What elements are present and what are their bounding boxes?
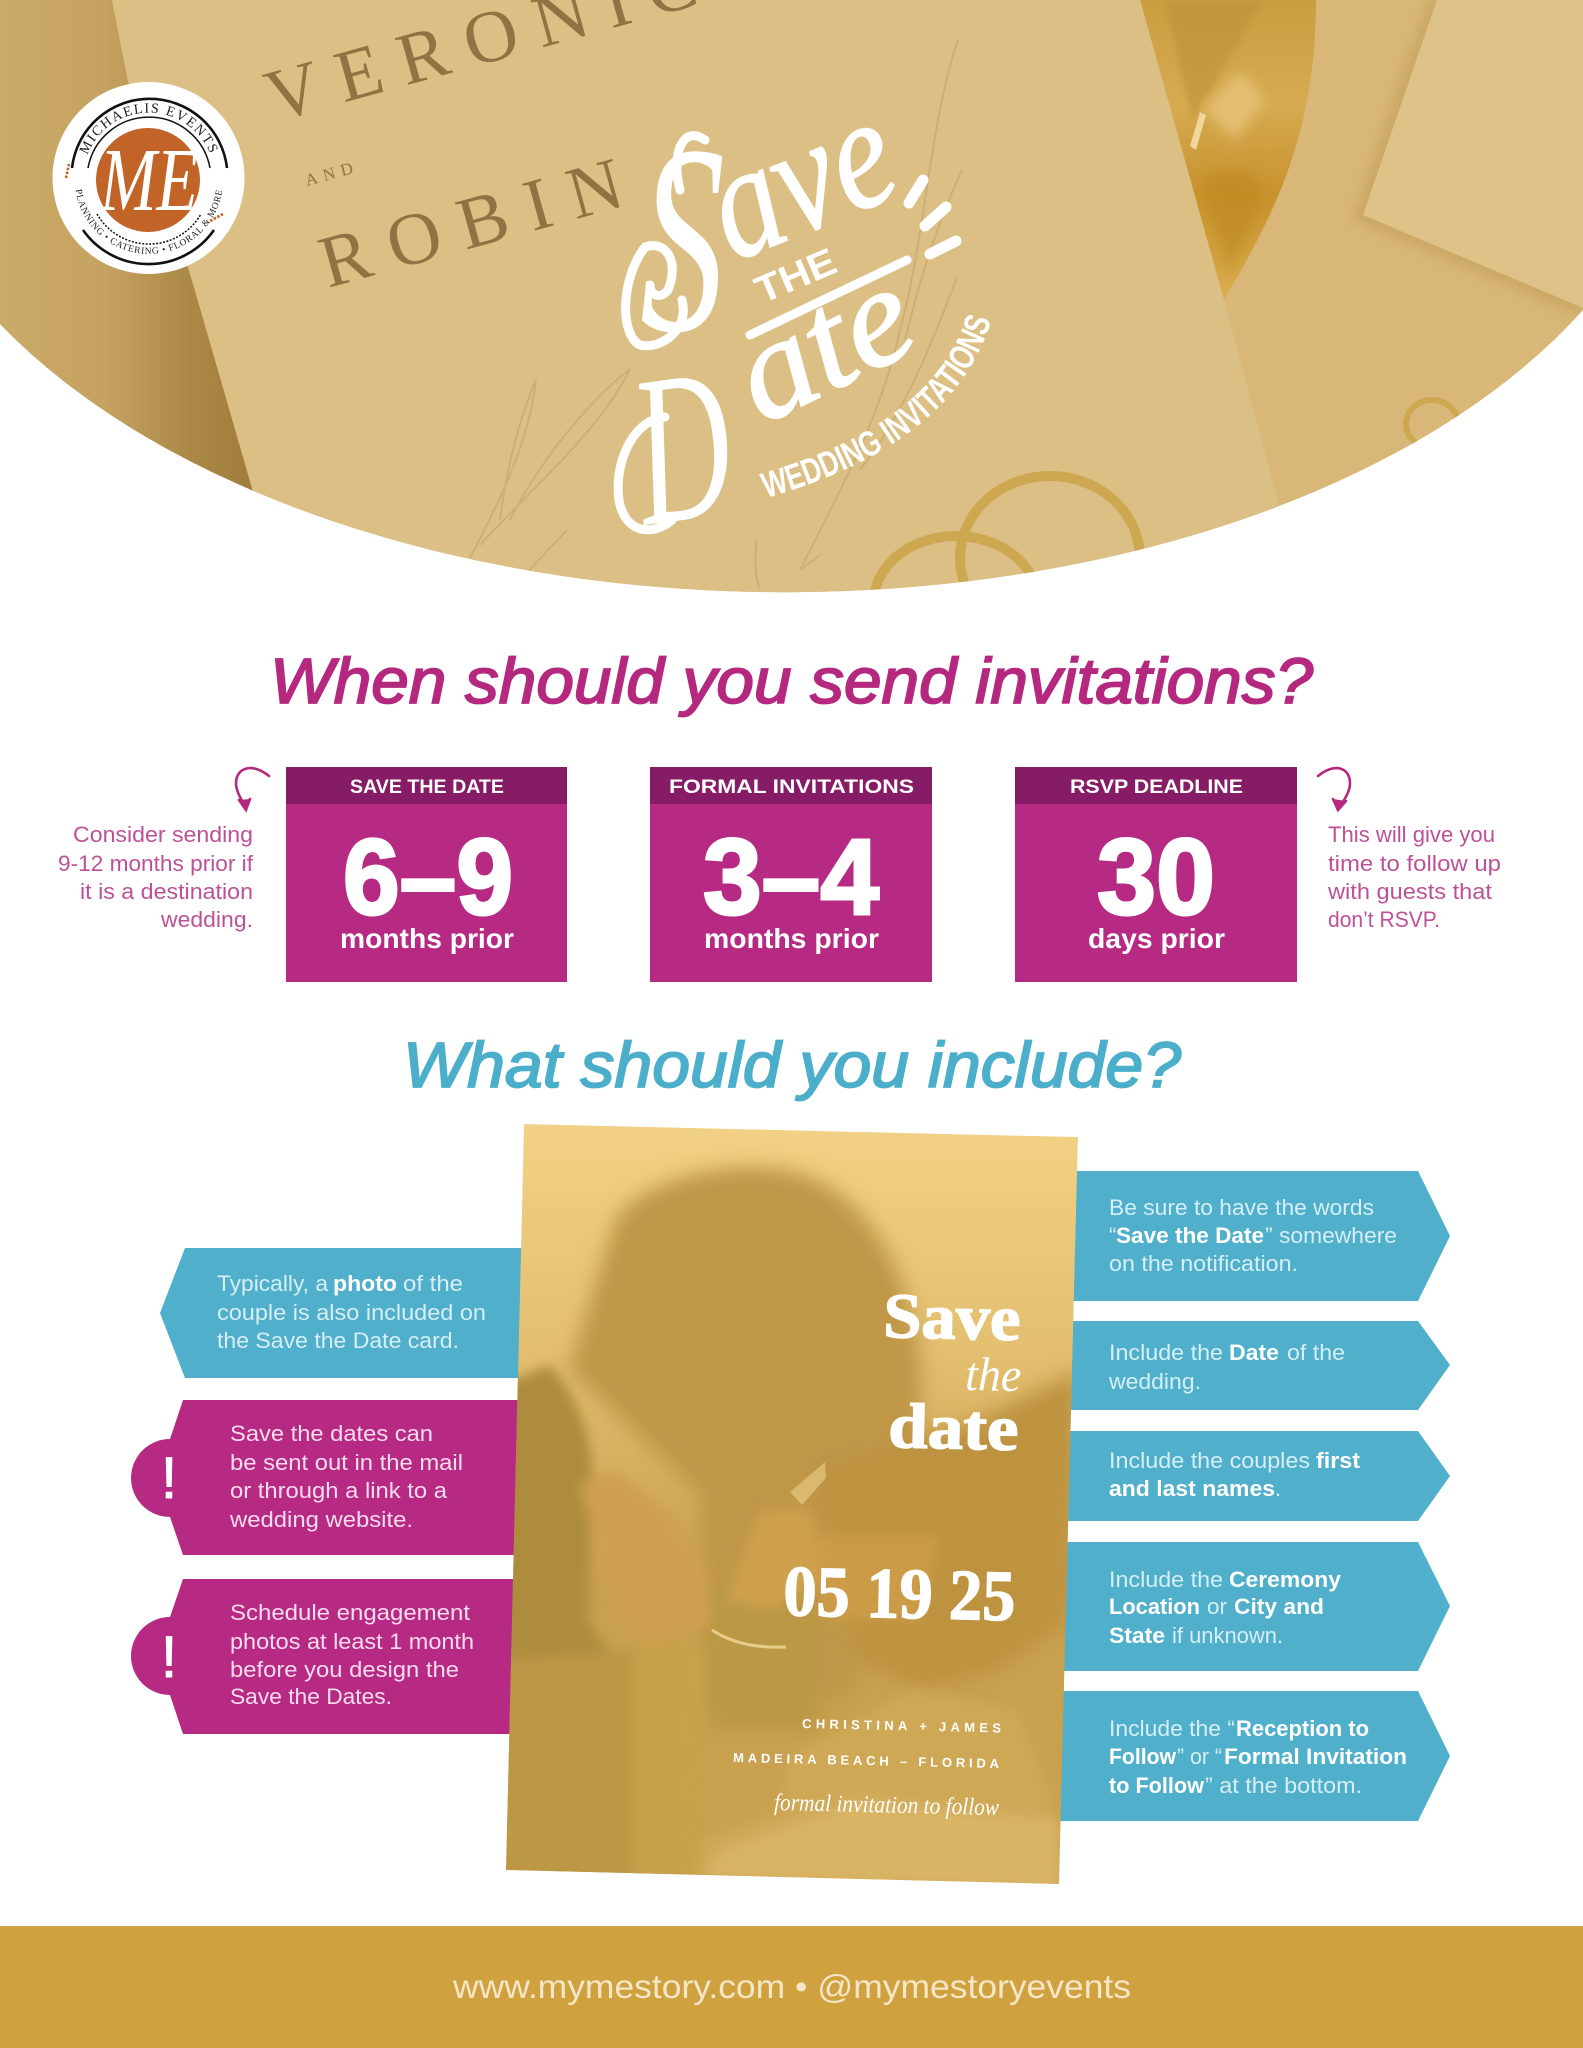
callout: couple names: first [1316,1448,1361,1473]
panel: save the date timing: 6–9 [343,816,513,937]
sample save the date card [500,1124,1080,1890]
panel: formal invitations timing: FORMAL INVITATIONS [669,777,914,798]
note: destination wedding: Consider sending [73,822,253,847]
callout: words save the date: Save the Date [1116,1223,1264,1248]
callout: ceremony location: Location [1109,1594,1200,1619]
note: follow up time [1327,822,1501,932]
gold foil leaf [1140,0,1316,300]
engraved names on card: AND [303,157,361,190]
save the date lettering: ave [679,60,919,294]
callout: ceremony location: Include the [1109,1567,1223,1592]
callout: photo of the couple [160,1248,540,1378]
callout: reception to follow: ” at the bottom. [1205,1773,1362,1798]
heading: what should you include: What should you include? [403,1029,1181,1101]
save the date lettering: THE [749,241,843,312]
callout: photo of the couple: Typically, a [217,1271,329,1296]
callout: couple names [1040,1431,1450,1521]
callout: words save the date: Be sure to have the words [1109,1195,1374,1220]
logo badge: Michaelis Events: MICHAELIS EVENTS [79,103,218,155]
save the date lettering: ate [708,235,937,453]
callout: date of the wedding: wedding. [1108,1369,1201,1394]
logo badge: Michaelis Events [52,82,244,274]
note: follow up time: This will give you [1328,822,1495,847]
card date: 05 19 25 [783,1551,1016,1636]
callout: mail or wedding website tip [131,1400,540,1555]
panel: formal invitations timing: months prior [704,923,879,954]
panel: rsvp deadline timing [1015,767,1297,982]
footer band: www.mymestory.com • @mymestoryevents [452,1968,1131,2005]
header photo: stationery flat lay [0,0,1583,592]
arrow: left note to save the date [236,768,269,810]
arrow: right note to rsvp deadline [1318,768,1350,810]
panel: save the date timing: months prior [340,923,514,954]
callout: photo of the couple: photo [333,1271,397,1296]
note: follow up time: don’t RSVP. [1328,907,1440,932]
callout: mail or wedding website tip: or through a link to a [230,1478,448,1503]
callout: date of the wedding: Include the [1109,1340,1223,1365]
gold rings [870,397,1460,590]
save the date lettering [614,60,990,572]
botanical line art [470,40,962,590]
sample save the date card: MADEIRA BEACH – FLORIDA [733,1750,1000,1771]
callout: ceremony location: if unknown. [1172,1623,1283,1648]
callout: ceremony location: City and [1234,1594,1324,1619]
callout: reception to follow: Formal Invitation [1224,1744,1407,1769]
save the date lettering: S [640,90,725,389]
callout: engagement photos tip: photos at least 1 month [230,1629,474,1654]
panel: save the date timing: SAVE THE DATE [350,777,504,798]
card photo: couple silhouette [500,1124,1080,1890]
callout: words save the date [1040,1171,1450,1301]
callout: reception to follow [1040,1691,1450,1821]
footer band [0,1926,1583,2048]
callout: engagement photos tip: Save the Dates. [230,1684,392,1709]
engraved names on card: ROBIN [311,137,651,304]
note: destination wedding: it is a destination [80,879,253,904]
save the date lettering: WEDDING INVITATIONS [759,315,990,497]
callout: ceremony location: Ceremony [1229,1567,1342,1592]
callout: date of the wedding: of the [1287,1340,1345,1365]
top-right paper sheet [1363,0,1583,308]
note: destination wedding: 9-12 months prior if [58,851,254,876]
callout: engagement photos tip: before you design the [230,1657,459,1682]
note: destination wedding: wedding. [160,907,253,932]
panel: formal invitations timing [650,767,932,982]
callout: mail or wedding website tip: wedding website. [229,1507,413,1532]
callout: words save the date: ” somewhere [1265,1223,1397,1248]
card details: CHRISTINA + JAMES [802,1716,1002,1736]
engraved names on card [262,0,696,288]
sample save the date card: formal invitation to follow [774,1790,999,1821]
callout: engagement photos tip: ! [161,1625,177,1690]
card headline: Save [883,1280,1021,1354]
callout: mail or wedding website tip: Save the dates can [230,1421,433,1446]
callout: date of the wedding: Date [1229,1340,1279,1365]
callout: photo of the couple: couple is also included on [217,1300,486,1325]
callout: engagement photos tip [131,1579,540,1734]
callout: ceremony location: State [1109,1623,1165,1648]
logo badge: Michaelis Events: PLANNING • CATERING • FLORAL & MORE [76,188,222,254]
sample save the date card: the [965,1348,1022,1402]
callout: reception to follow: Reception to [1236,1716,1369,1741]
callout: ceremony location [1040,1542,1450,1671]
callout: photo of the couple: the Save the Date card. [217,1328,459,1353]
main invitation card [112,0,1310,620]
callout: date of the wedding [1040,1321,1450,1410]
panel: formal invitations timing: 3–4 [703,816,879,937]
callout: reception to follow: Include the “ [1109,1716,1235,1741]
panel: rsvp deadline timing: 30 [1097,816,1215,937]
callout: reception to follow: Follow [1109,1744,1177,1769]
panel: rsvp deadline timing: days prior [1088,923,1225,954]
callout: words save the date: on the notification. [1109,1251,1298,1276]
callout: mail or wedding website tip: be sent out in the mail [230,1450,463,1475]
callout: couple names: Include the couples [1109,1448,1310,1473]
logo badge: Michaelis Events: ME [98,131,198,230]
callout: words save the date: “ [1109,1223,1116,1248]
callout: ceremony location: or [1207,1594,1227,1619]
panel: rsvp deadline timing: RSVP DEADLINE [1070,777,1243,798]
callout: couple names: and last names [1109,1476,1275,1501]
callout: reception to follow: ” or “ [1177,1744,1222,1769]
callout: photo of the couple: of the [403,1271,463,1296]
callout: mail or wedding website tip: ! [161,1446,177,1511]
panel: save the date timing [286,767,567,982]
note: follow up time: time to follow up [1328,851,1501,876]
callout: reception to follow: to Follow [1109,1773,1205,1798]
save the date lettering: D [616,322,746,572]
heading: when should you send invitations: When should you send invitations? [270,645,1313,717]
note: destination wedding [58,822,254,932]
callout: couple names: . [1275,1476,1281,1501]
decorative swashes [618,136,956,530]
sample save the date card: date [888,1390,1019,1464]
note: follow up time: with guests that [1327,879,1492,904]
callout: engagement photos tip: Schedule engagement [230,1600,470,1625]
